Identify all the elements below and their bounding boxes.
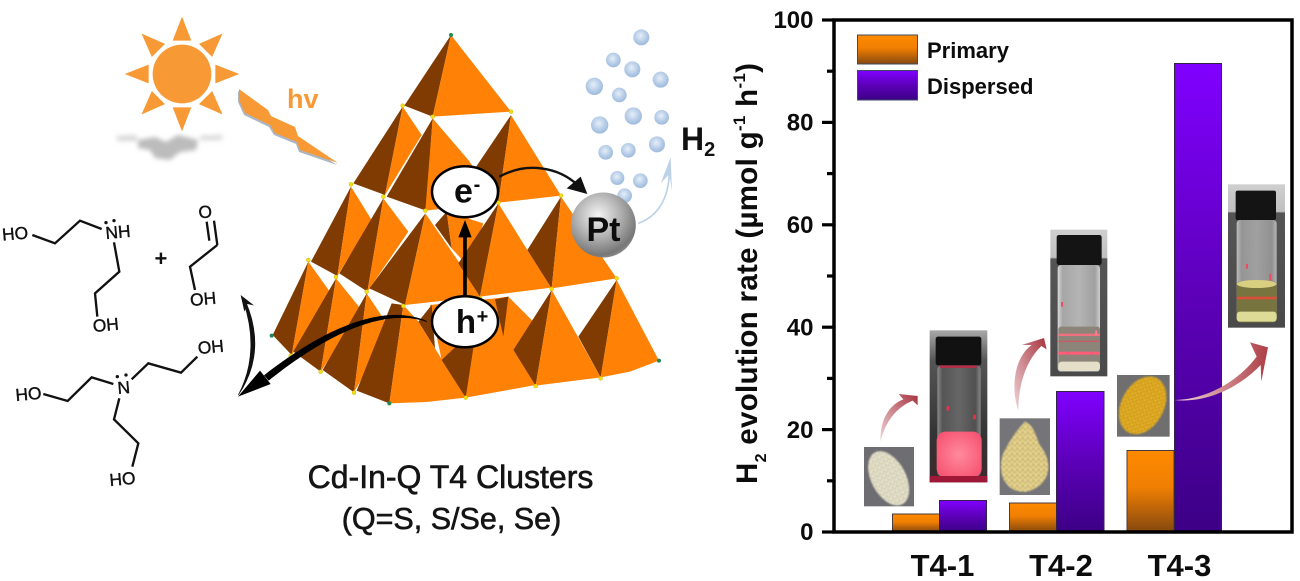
caption: cluster name [308,459,593,536]
label: plus sign: + [154,246,167,271]
arrow: curved reaction arrow [238,295,255,395]
photo: T4-1 vial [930,330,987,482]
molecule: diethanolamine [1,219,131,336]
top tetrahedron [404,35,511,117]
label: H2: 2 [704,139,715,161]
icon: electron bubble: e [454,172,473,210]
bar: T4-3 dispersed [1174,64,1222,532]
y axis tick labels: 100 [773,7,814,34]
axes frame [834,20,1292,532]
y axis title: -1 [730,73,749,89]
legend: Primary [927,38,1010,63]
chart: H2 evolution rate [730,7,1292,581]
label: hv: hv [287,84,319,114]
y axis tick labels: 60 [787,212,814,239]
bottom layer [273,262,659,403]
molecule: glycolaldehyde: O [198,201,213,222]
bar: T4-1 dispersed [940,500,986,532]
molecule: diethanolamine: HO [1,222,29,245]
molecule: diethanolamine: OH [92,314,120,336]
icon: Pt sphere [571,192,636,258]
molecule: glycolaldehyde [189,201,217,310]
photo: T4-2 powder [1000,418,1050,495]
arrow: from Pt to H2 [638,157,672,223]
arrow: T4-3 powder to vial [1174,342,1268,401]
caption: cluster name: Cd-In-Q T4 Clusters [308,459,593,495]
arrow: hole to electron [458,220,472,295]
icon: hole bubble: + [477,306,488,328]
arrow: electron to Pt [499,168,587,194]
third layer [311,187,617,305]
y axis title: 2 [753,453,770,462]
molecule: triethanolamine: OH [197,336,225,358]
arrow: T4-2 powder to vial [1014,338,1047,411]
legend: Dispersed [927,74,1033,99]
icon: hole bubble: h [456,303,476,340]
vertices [289,104,619,400]
caption: cluster name: (Q=S, S/Se, Se) [342,502,561,536]
bar: T4-3 primary [1127,450,1174,532]
bubbles: hydrogen [586,29,669,203]
molecule: triethanolamine [15,336,225,490]
icon: electron bubble [432,166,498,217]
y axis title: H [731,463,764,484]
photo: T4-3 vial [1228,184,1285,328]
y axis tick labels: 0 [800,519,814,546]
molecule: triethanolamine: HO [109,468,136,490]
icon: electron bubble: - [474,174,480,196]
x axis labels [911,548,1211,581]
second layer [353,107,561,211]
icon: light bolt [238,89,338,165]
photo: T4-2 vial [1050,230,1107,376]
molecule: triethanolamine: HO [15,383,42,405]
label: H2: H [681,121,704,157]
photo: T4-3 powder [1109,368,1176,442]
y axis tick labels: 80 [787,110,814,136]
arrow: T4-1 powder to vial [881,394,918,442]
bar: T4-2 primary [1010,503,1056,532]
molecule: diethanolamine: NH [105,221,131,243]
icon: Pt sphere: Pt [586,211,620,249]
icon: sun with shadow [116,17,239,160]
y axis title: -1 [730,116,749,131]
y axis tick labels [773,7,814,546]
y axis title: ) [731,63,764,73]
y axis title: evolution rate (µmol g [731,131,764,453]
legend [858,35,1033,100]
y axis tick labels: 40 [787,314,814,342]
y axis tick labels: 20 [787,417,814,444]
y axis title: h [731,89,764,115]
photo: T4-1 powder [860,444,918,512]
axis ticks [822,20,834,532]
bar: T4-1 primary [892,514,940,532]
bar: T4-2 dispersed [1056,392,1104,532]
cluster: T4 pyramid [270,33,661,405]
molecule: glycolaldehyde: OH [189,288,217,310]
arrow: hole to triethanolamine [238,315,427,397]
molecule: triethanolamine: N [117,377,131,398]
icon: hole bubble [432,296,498,347]
